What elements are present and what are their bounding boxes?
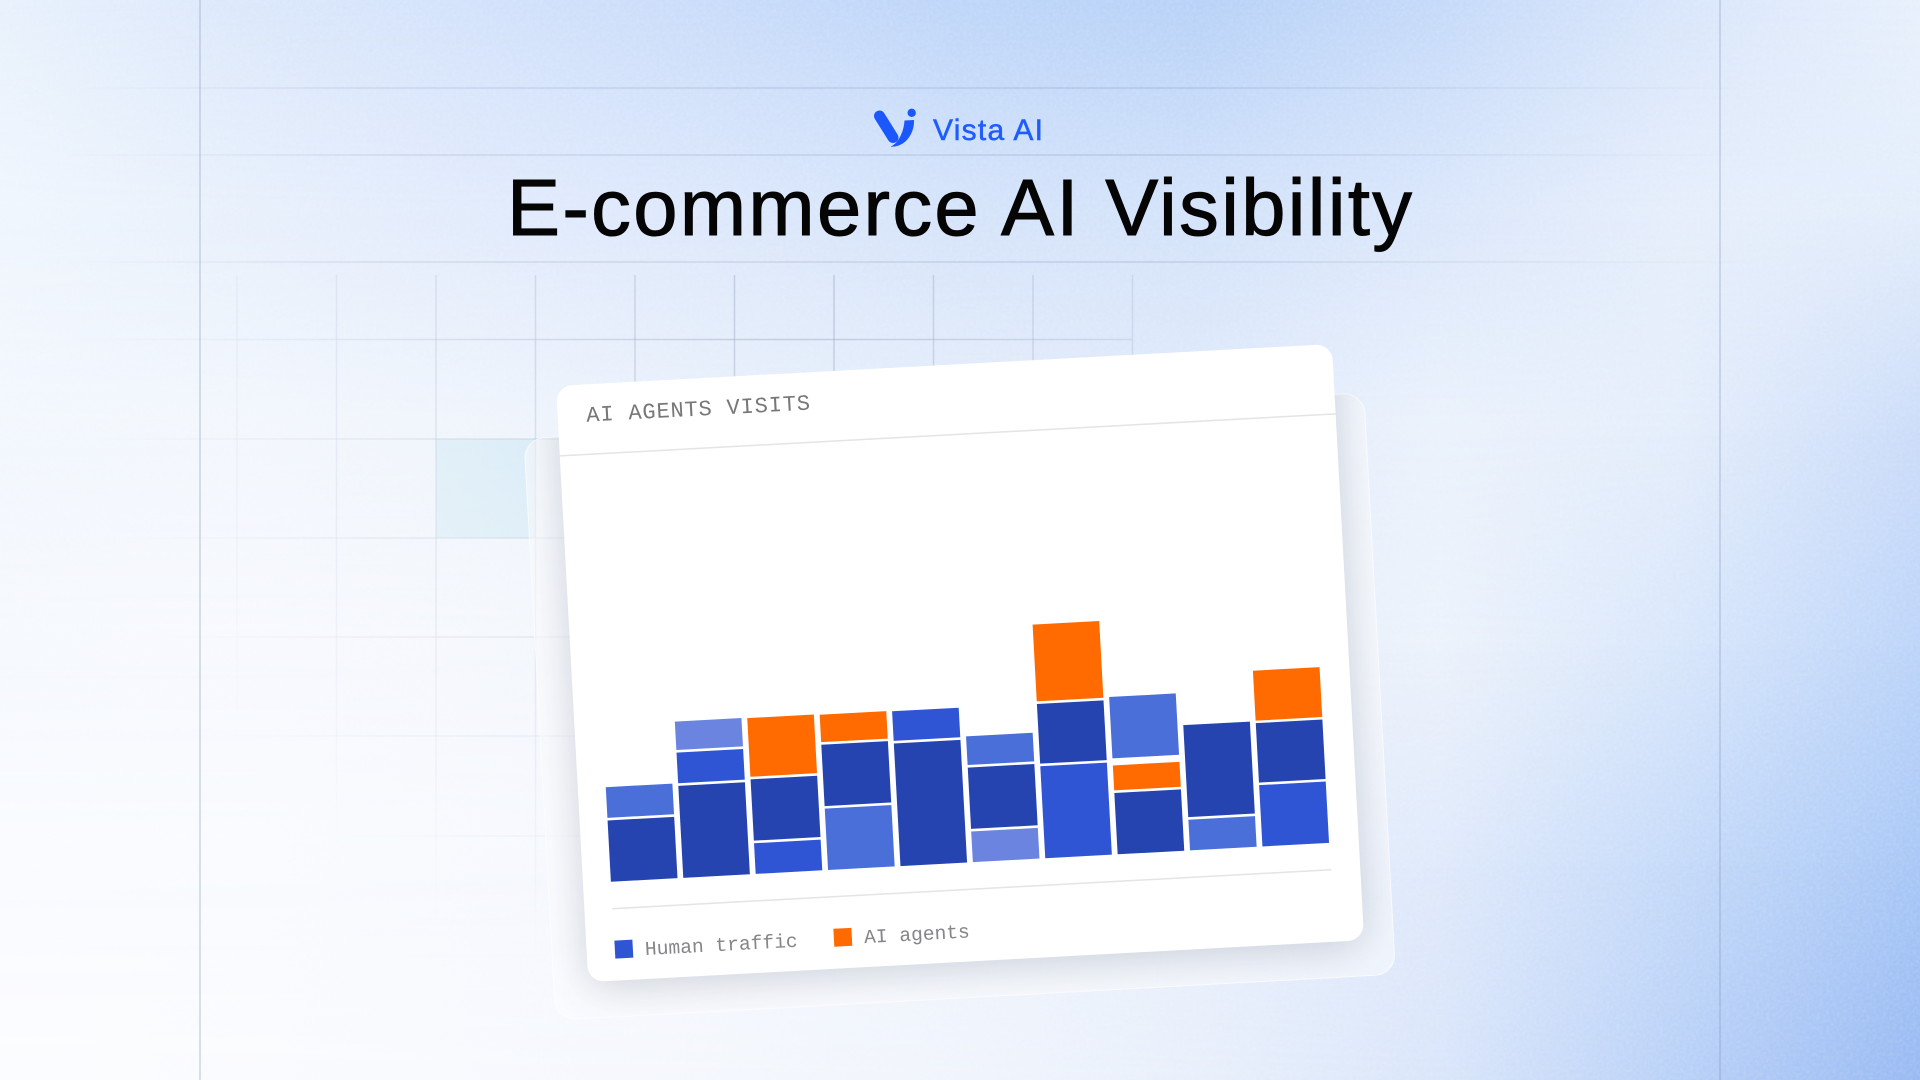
legend: AI agents: AI agents bbox=[864, 921, 970, 949]
brand name: Vista AI bbox=[933, 114, 1043, 147]
bar 3 bbox=[747, 715, 822, 874]
panel: back card bbox=[522, 348, 1396, 1020]
bar 1 bbox=[606, 784, 677, 882]
icon: Vista V mark bbox=[880, 109, 916, 147]
bar 5 bbox=[892, 708, 967, 866]
bar 4 bbox=[820, 711, 895, 870]
card surface bbox=[556, 344, 1364, 982]
bar 8 bbox=[1109, 693, 1184, 854]
bar 6 bbox=[966, 733, 1039, 862]
stacked bar chart bbox=[598, 609, 1329, 882]
panel: AI agents visits chart card bbox=[556, 344, 1364, 982]
legend bbox=[614, 921, 970, 963]
bar 9 bbox=[1183, 722, 1257, 850]
bar 10 bbox=[1253, 667, 1329, 846]
grid backdrop bbox=[230, 275, 1134, 837]
legend: human traffic: Human traffic bbox=[644, 931, 798, 961]
card heading: AI AGENTS VISITS bbox=[586, 392, 812, 429]
bar 7 bbox=[1033, 621, 1112, 858]
bar 2 bbox=[675, 718, 750, 878]
title: E-commerce AI Visibility bbox=[507, 163, 1412, 252]
logo: Vista AI bbox=[880, 109, 1043, 147]
